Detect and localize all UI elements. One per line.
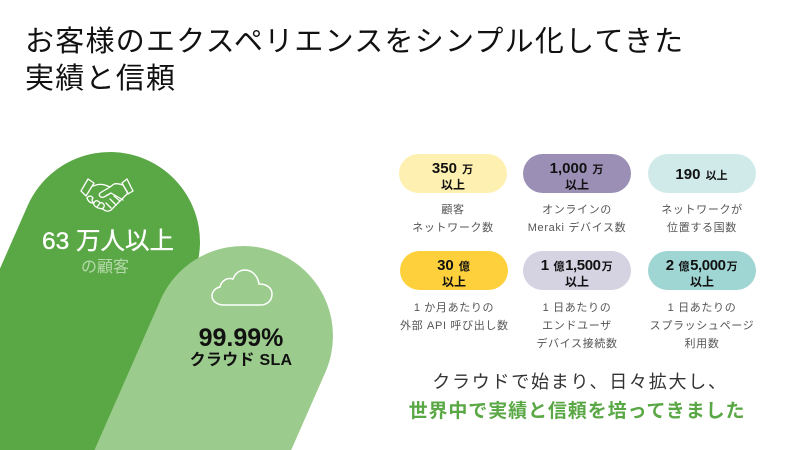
caption: 1 日あたりの [543,302,611,314]
card: end-user devices [523,251,631,350]
icon: handshake [81,179,133,211]
card: Meraki devices [523,154,631,234]
caption: デバイス接続数 [536,338,618,350]
pill: 1,000万以上 [523,154,631,193]
caption: 1 日あたりの [668,302,736,314]
caption: ネットワーク数 [412,222,494,234]
pill: 1,000万以上: 以上 [565,178,589,192]
light green capsule [94,246,333,450]
caption: 利用数 [685,338,719,350]
text: 99.99%: 99.99% [199,324,283,352]
pill: 350万以上: 350 万 [432,160,473,177]
pill: 350万以上 [399,154,507,193]
icon: cloud [212,270,272,305]
caption [528,204,626,234]
caption [536,302,618,350]
text: closing highlight: 世界中で実績と信頼を培ってきました [409,401,745,422]
caption [661,204,743,234]
text: customers caption: の顧客 [81,259,129,276]
pill: 1億1,500万以上 [523,251,631,290]
pill: 350万以上: 以上 [441,178,465,192]
pill: 1億1,500万以上: 以上 [565,275,589,289]
pill: 190以上: 190 以上 [675,166,728,183]
caption [412,204,494,234]
caption: スプラッシュページ [650,320,754,332]
card: customer networks [399,154,507,234]
caption: 位置する国数 [667,222,737,234]
caption: 顧客 [441,204,465,216]
card: countries [648,154,756,234]
text: 63 million customers: 63 万人以上 [42,228,174,255]
title: お客様のエクスペリエンスをシンプル化してきた [25,26,684,58]
pill: 30億以上: 以上 [442,275,466,289]
text: closing line: クラウドで始まり、日々拡大し、 [432,372,728,392]
pill: 2億5,000万以上: 以上 [690,275,714,289]
caption: ネットワークが [661,204,743,216]
caption: エンドユーザ [542,320,612,332]
caption: 外部 API 呼び出し数 [400,320,509,332]
text: cloud SLA: クラウド SLA [190,352,292,369]
caption [650,302,754,350]
title [25,26,684,95]
caption [400,302,509,332]
pill: 190以上 [648,154,756,193]
caption: オンラインの [542,204,612,216]
card: splash pages [648,251,756,350]
dark green capsule [0,152,200,450]
caption: Meraki デバイス数 [528,222,626,234]
pill: 2億5,000万以上: 2 億5,000万 [666,257,737,274]
pill: 2億5,000万以上 [648,251,756,290]
pill: 1,000万以上: 1,000 万 [550,160,603,177]
pill: 30億以上 [400,251,508,290]
card: API calls [400,251,509,332]
title: 実績と信頼 [25,63,176,95]
caption: 1 か月あたりの [414,302,494,314]
pill: 1億1,500万以上: 1 億1,500万 [541,257,612,274]
pill: 30億以上: 30 億 [437,257,470,274]
